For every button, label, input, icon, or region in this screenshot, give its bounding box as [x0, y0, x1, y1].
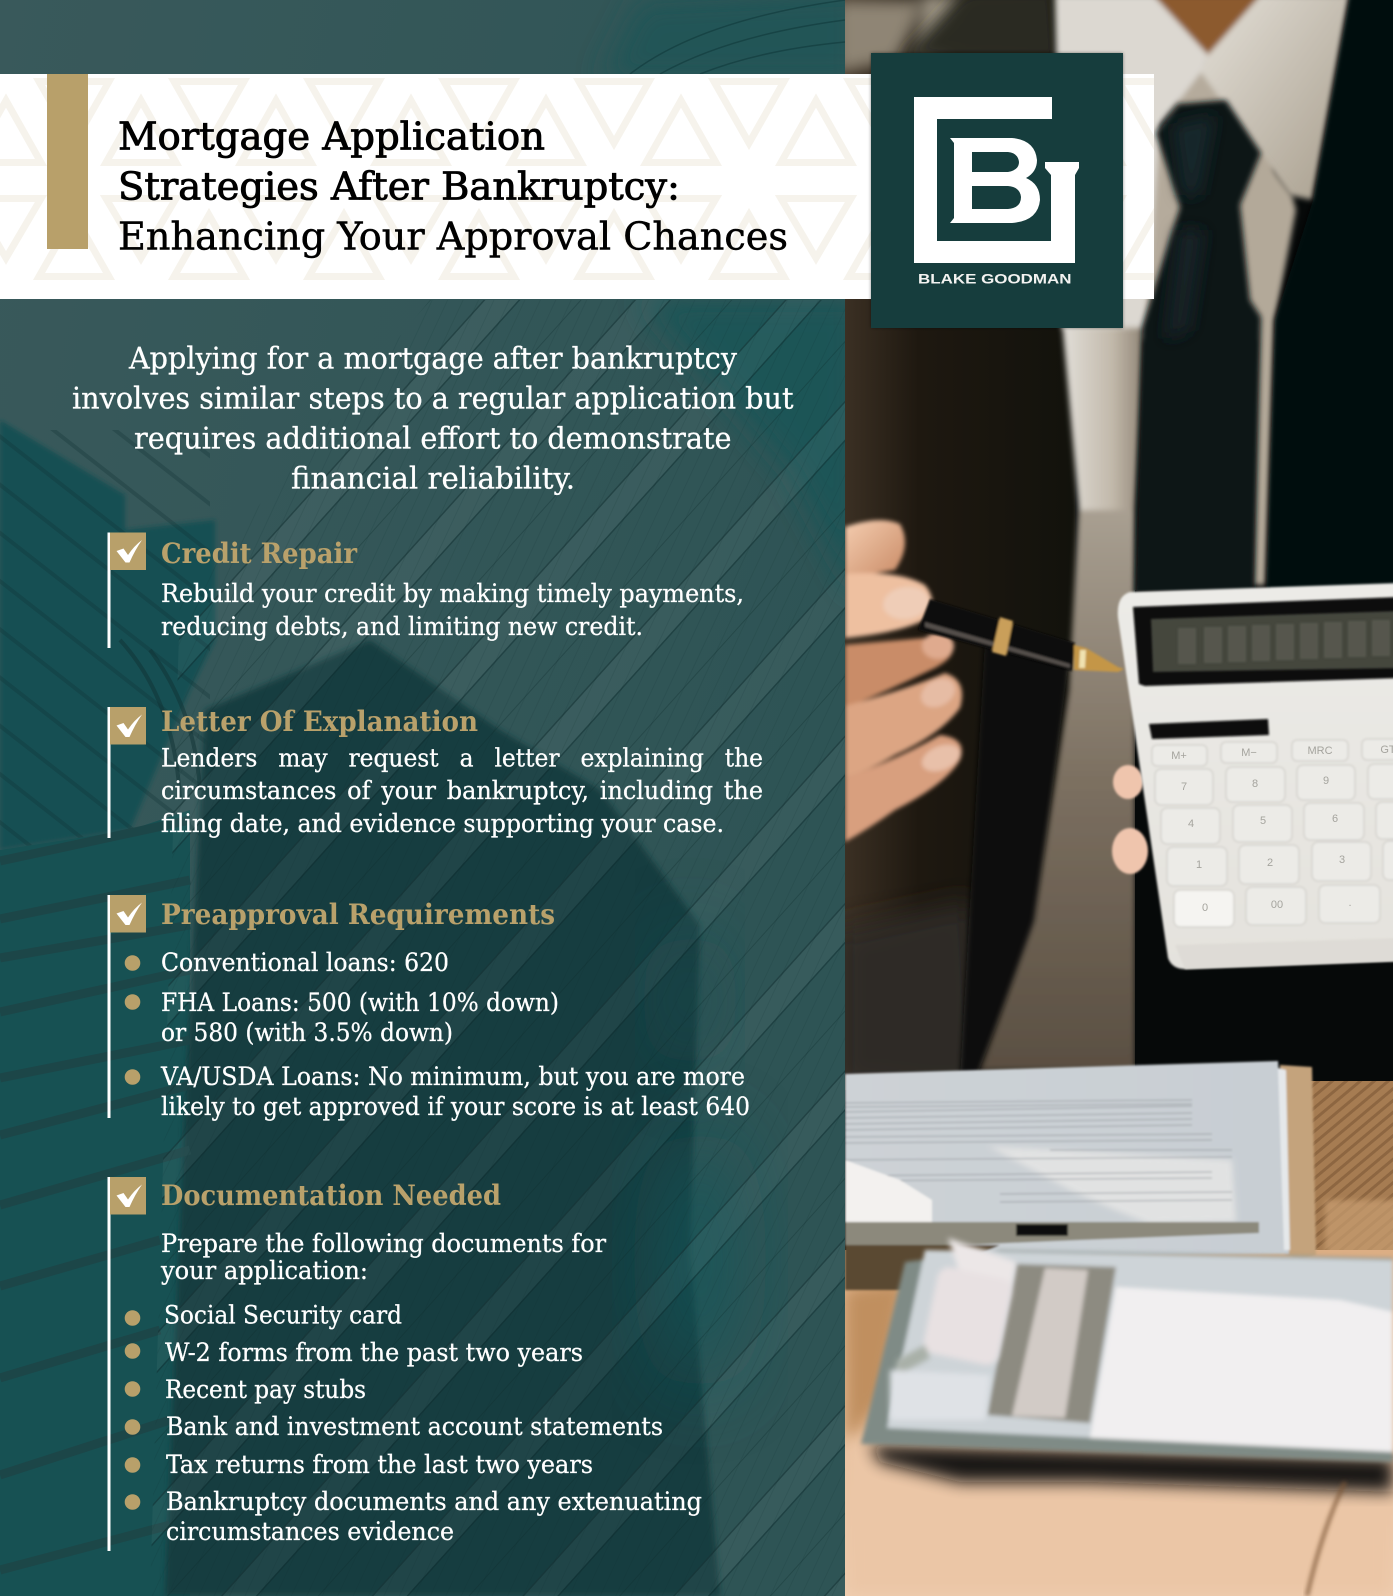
calculator: 2: [1267, 857, 1273, 869]
calculator: 0: [1202, 902, 1208, 914]
logo mark: letter B: [950, 138, 1040, 223]
heading: Preapproval Requirements: [161, 898, 555, 931]
body text: circumstances of your bankruptcy, including the: [161, 776, 763, 805]
bullet list: Social Security card: [164, 1300, 402, 1330]
heading: Letter Of Explanation: [161, 705, 478, 738]
heading: Documentation Needed: [161, 1179, 501, 1212]
shirt: lower placket: [981, 320, 1145, 1070]
calculator: M+: [1171, 750, 1187, 762]
bullet list: Tax returns from the last two years: [166, 1450, 593, 1479]
calculator: 00: [1271, 899, 1283, 911]
calculator: 4: [1188, 818, 1194, 830]
calculator: .: [1348, 897, 1352, 909]
section: Documentation Needed: [108, 1177, 702, 1551]
body text: [161, 579, 744, 641]
title: Strategies After Bankruptcy:: [118, 164, 680, 208]
calculator: 9: [1323, 775, 1329, 787]
bullet list: FHA Loans: 500 (with 10% down): [161, 988, 559, 1017]
calculator: MRC: [1307, 745, 1333, 757]
intro paragraph: involves similar steps to a regular application but: [72, 382, 794, 416]
icon: check badge: [110, 895, 146, 932]
icon: check badge: [110, 1177, 146, 1214]
bullet list: VA/USDA Loans: No minimum, but you are more: [160, 1062, 745, 1091]
lower clipboard with contract: [861, 1238, 1393, 1492]
intro paragraph: [72, 342, 794, 496]
panel: right photograph: [835, 0, 1393, 1596]
calculator fingers: [1112, 765, 1148, 874]
title: Enhancing Your Approval Chances: [118, 214, 788, 258]
intro paragraph: financial reliability.: [291, 462, 575, 496]
section: Letter Of Explanation: [108, 705, 763, 838]
body text: your application:: [160, 1256, 368, 1285]
bullet list: [125, 948, 750, 1121]
bullet list: Recent pay stubs: [165, 1375, 366, 1404]
accent: gold bar: [47, 74, 88, 249]
bullet list: Bankruptcy documents and any extenuating: [166, 1487, 702, 1516]
triangle pattern: [0, 82, 1189, 276]
wood table: [845, 1081, 1393, 1596]
title: Mortgage Application: [118, 114, 545, 158]
calculator: 3: [1339, 854, 1345, 866]
wood shadow and plank gap: [1307, 1482, 1345, 1596]
intro paragraph: requires additional effort to demonstrate: [134, 422, 732, 456]
bullet list: or 580 (with 3.5% down): [161, 1018, 453, 1047]
logo mark: bracket and letter B: [914, 97, 1079, 263]
body text: [160, 1229, 606, 1285]
heading: Credit Repair: [161, 537, 358, 570]
logo wordmark: BLAKE GOODMAN: [918, 270, 1072, 286]
banner: white title strip: [0, 74, 1189, 299]
skin and collar: [1055, 0, 1350, 340]
body text: Rebuild your credit by making timely payments,: [161, 579, 744, 608]
bullet list: Conventional loans: 620: [161, 948, 449, 977]
body text: Prepare the following documents for: [161, 1229, 606, 1258]
upper document and clipboard: [845, 1061, 1316, 1290]
calculator: 7: [1181, 781, 1187, 793]
logo: Blake Goodman: [871, 53, 1123, 328]
panel: left building photo background: [0, 0, 860, 1596]
calculator: M−: [1241, 747, 1257, 759]
right shirt strip and jacket: [1252, 0, 1355, 588]
calculator: 6: [1332, 813, 1338, 825]
calculator: [1118, 583, 1393, 969]
body text: Lenders may request a letter explaining the: [161, 744, 763, 772]
body text: [161, 744, 763, 838]
body text: reducing debts, and limiting new credit.: [161, 612, 643, 641]
pen: [918, 599, 1124, 672]
icon: check badge: [110, 707, 146, 744]
tie: [1135, 100, 1393, 1085]
hand: fingers holding the pen: [845, 520, 964, 842]
icon: check badge: [110, 532, 146, 570]
section: Preapproval Requirements: [108, 895, 750, 1121]
calculator: 8: [1252, 778, 1258, 790]
calculator: 5: [1260, 815, 1266, 827]
bullet list: W-2 forms from the past two years: [165, 1338, 583, 1367]
bullet list: circumstances evidence: [166, 1517, 454, 1546]
jacket: left side: [835, 0, 1075, 1090]
bullet list: Bank and investment account statements: [166, 1412, 663, 1441]
intro paragraph: Applying for a mortgage after bankruptcy: [128, 342, 738, 376]
bullet list: likely to get approved if your score is at least 640: [161, 1092, 750, 1121]
calculator: 1: [1196, 859, 1202, 871]
title: [118, 114, 788, 258]
body text: filing date, and evidence supporting your case.: [161, 809, 724, 838]
section: Credit Repair: [108, 532, 744, 648]
bullet list: [125, 1300, 702, 1546]
